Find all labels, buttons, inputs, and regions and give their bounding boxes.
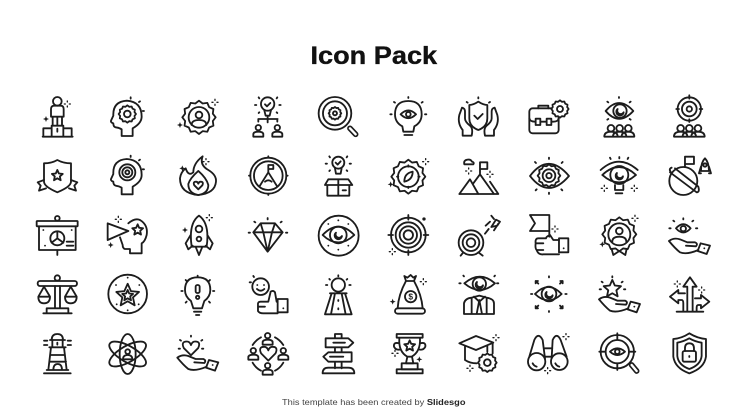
icon: money bag <box>390 275 426 314</box>
icon: head with gear <box>111 97 144 136</box>
icon: diamond <box>249 218 287 252</box>
icon: four people around heart <box>248 333 288 375</box>
icon: eye over bulb <box>601 157 638 193</box>
footer credit: This template has been created by Slidesgo <box>282 398 465 407</box>
icon row 1, left half <box>43 97 356 137</box>
icon: atom with person <box>106 334 150 374</box>
icon row 3, left half <box>37 215 359 256</box>
icon: eye with corner arrows <box>531 276 567 312</box>
icon: concentric target <box>388 215 428 255</box>
icon row 4, right half <box>390 275 709 314</box>
icon: balance scale <box>38 275 77 313</box>
icon row 2, left half <box>38 156 352 196</box>
icon: bulb with exclamation mark <box>181 276 214 315</box>
icon: head with star and cone <box>108 216 147 253</box>
icon: bulb over two people <box>253 97 282 137</box>
icon: bulb rising from box <box>325 156 352 196</box>
icon row 4, left half <box>38 275 352 315</box>
icon: planet with flag and rocket <box>669 157 711 195</box>
icon: money bag: $ <box>408 292 413 302</box>
icon: lighthouse <box>44 334 71 373</box>
icon: crossroad arrows <box>670 277 709 312</box>
icon: gear with compass <box>388 159 429 194</box>
icon: target over three people <box>674 95 705 137</box>
icon: shield with padlock <box>673 333 706 373</box>
icon: hands holding shield <box>459 97 498 136</box>
icon: star in circle <box>108 275 147 313</box>
icon: magnifier with eye <box>599 333 637 371</box>
icon: eye over three people <box>604 97 634 137</box>
icon: mountains with flag <box>459 160 498 194</box>
icon row 5, right half <box>392 333 706 374</box>
icon: bulb with eye <box>390 97 426 135</box>
icon: graduation cap with gear <box>459 335 499 372</box>
icon: hand under star <box>599 276 640 312</box>
icon: award badge with person <box>599 215 638 255</box>
icon: magnifier on target <box>319 97 356 134</box>
icon: mountain flag in circle <box>249 156 288 195</box>
icon: hand under eye <box>669 218 710 254</box>
icon: hand holding flag <box>530 215 568 254</box>
icon: businessperson with eye head <box>459 276 498 314</box>
icon row 1, right half <box>390 95 705 137</box>
icon: hand under heart <box>177 336 218 371</box>
icon: arrow and archery target <box>459 216 500 256</box>
icon: eye in circle <box>319 216 359 256</box>
icon: binoculars <box>528 334 569 374</box>
title: Icon Pack <box>310 41 438 70</box>
icon: smiley with thumbs up <box>250 276 288 313</box>
icon: briefcase with gear <box>529 100 569 133</box>
icon: head with target <box>111 156 144 194</box>
icon: rocket <box>182 215 213 255</box>
icon: person on podium <box>43 97 73 137</box>
icon: eye with gear <box>530 158 569 194</box>
icon: trophy <box>392 334 425 373</box>
icon: direction signpost <box>323 334 354 373</box>
icon row 2, right half <box>388 157 711 195</box>
icon: gear with person <box>177 99 218 134</box>
icon row 5, left half <box>44 333 354 375</box>
icon row 3, right half <box>388 215 710 256</box>
icon: shield with star and ribbon <box>38 160 77 192</box>
icon: presentation board with pie chart <box>37 216 78 255</box>
icon: flame with heart <box>179 156 216 195</box>
icon: road to sun <box>325 275 352 314</box>
